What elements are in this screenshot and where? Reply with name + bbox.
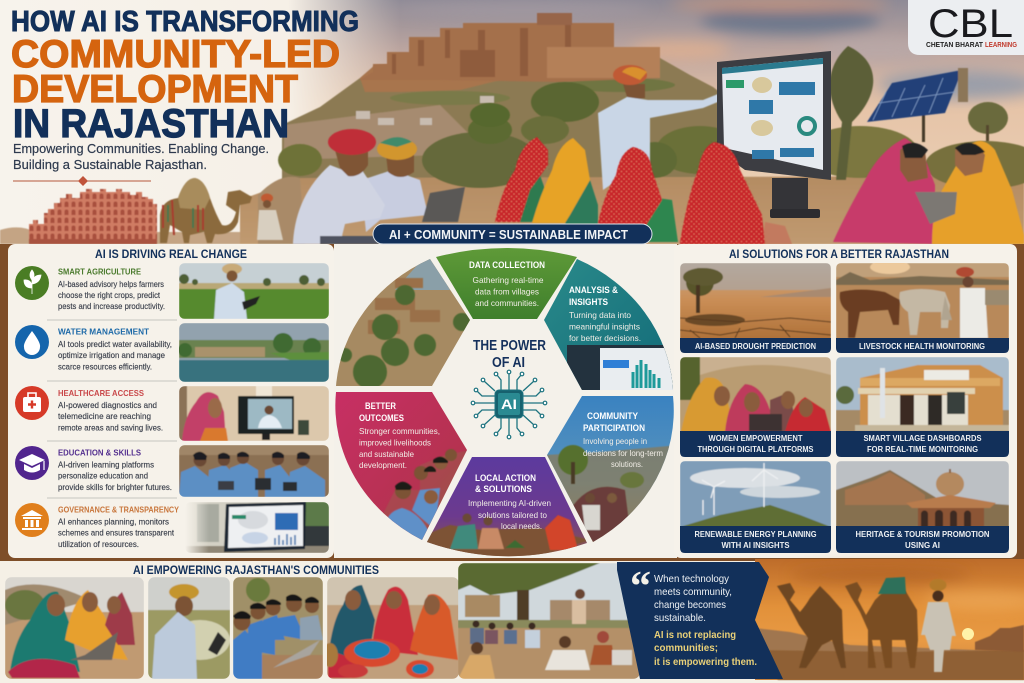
tile: heritage and tourism: HERITAGE & TOURISM PROMOTION — [856, 529, 990, 539]
tile: drought prediction: AI-BASED DROUGHT PREDICTION — [695, 341, 816, 351]
panel heading: AI IS DRIVING REAL CHANGE — [95, 247, 247, 261]
icon: decorated camel — [160, 178, 252, 243]
photo: man with tablet — [148, 577, 230, 679]
row: governance and transparency: schemes and ensures transparent — [58, 528, 175, 538]
segment: better outcomes: Stronger communities, — [359, 426, 440, 436]
quote text: When technology — [654, 573, 730, 585]
tile: women empowerment — [680, 357, 831, 457]
presenter — [598, 65, 725, 190]
segment: community participation: COMMUNITY — [587, 411, 639, 422]
logo: Chetan Bharat Learning: CHETAN BHARAT — [926, 40, 983, 49]
segment: local action and solutions: LOCAL ACTION — [475, 473, 536, 484]
row: healthcare access: AI-powered diagnostics and — [58, 400, 157, 410]
icon: solar panel — [867, 68, 968, 142]
segment: analysis and insights: meaningful insights — [569, 322, 640, 332]
title: HOW AI IS TRANSFORMING — [11, 6, 359, 38]
panel: the power of AI — [330, 244, 680, 565]
center heading: OF AI — [492, 355, 525, 371]
tile: women empowerment: WOMEN EMPOWERMENT — [708, 433, 803, 443]
row: governance and transparency: utilization of resources. — [58, 539, 139, 549]
segment: community participation — [547, 396, 674, 542]
row: education and skills: personalize education and — [58, 470, 148, 480]
photo: village meeting — [458, 563, 640, 679]
row: water management: optimize irrigation and manage — [58, 350, 165, 360]
photo: women with laptop — [5, 577, 144, 679]
segment: local action and solutions: local needs. — [501, 521, 542, 531]
row: governance and transparency: AI enhances planning, monitors — [58, 516, 169, 526]
row: healthcare access — [15, 386, 329, 441]
row: smart agriculture: SMART AGRICULTURE — [58, 266, 141, 276]
land and trees — [0, 46, 1024, 244]
icon: Hawa Mahal palace — [29, 189, 157, 244]
panel: AI solutions for a better Rajasthan — [674, 244, 1017, 558]
row: smart agriculture: choose the right crops, predict — [58, 290, 161, 300]
icon: AI chip — [471, 370, 547, 439]
tile: heritage and tourism — [836, 461, 1009, 553]
segment: analysis and insights: for better decisions. — [569, 333, 641, 343]
segment: analysis and insights: INSIGHTS — [569, 297, 608, 308]
row: education and skills: AI-driven learning platforms — [58, 460, 154, 470]
women with tablet — [833, 138, 1024, 244]
tile: women empowerment: THROUGH DIGITAL PLATFORMS — [698, 444, 814, 454]
tile: renewable energy: WITH AI INSIGHTS — [722, 540, 790, 550]
logo: Chetan Bharat Learning: LEARNING — [985, 40, 1017, 49]
quote text: sustainable. — [654, 612, 706, 624]
segment: community participation: solutions. — [611, 459, 643, 469]
segment: better outcomes: improved livelihoods — [359, 438, 431, 448]
quote text — [654, 573, 732, 624]
row: education and skills: provide skills for brighter futures. — [58, 482, 172, 492]
segment: data collection: Gathering real-time — [472, 275, 544, 285]
row: governance and transparency: GOVERNANCE & TRANSPARENCY — [58, 504, 179, 514]
row: governance and transparency — [15, 502, 329, 553]
row: education and skills — [15, 445, 329, 497]
segment: better outcomes: development. — [359, 460, 407, 470]
row: water management — [15, 323, 329, 382]
row: water management: WATER MANAGEMENT — [58, 326, 150, 336]
segment: analysis and insights: ANALYSIS & — [569, 285, 618, 296]
segment: analysis and insights — [544, 259, 675, 391]
row: water management: scarce resources efficiently. — [58, 362, 152, 372]
segment: local action and solutions: solutions tailored to — [478, 510, 547, 520]
strip heading: AI EMPOWERING RAJASTHAN'S COMMUNITIES — [133, 563, 379, 577]
row: water management: AI tools predict water availability, — [58, 339, 172, 349]
segment: data collection: and communities. — [475, 298, 539, 308]
segment: data collection: DATA COLLECTION — [469, 260, 545, 271]
sky — [295, 0, 1024, 244]
center heading — [473, 338, 546, 371]
photo: women with craft — [322, 577, 459, 679]
quote highlight: communities; — [654, 642, 718, 654]
hero illustration — [0, 0, 1024, 244]
clouds — [390, 0, 1024, 99]
center heading: THE POWER — [473, 338, 546, 354]
banner: AI + community = sustainable impact: AI + COMMUNITY = SUSTAINABLE IMPACT — [389, 227, 628, 242]
row divider — [47, 380, 177, 382]
camel saddle — [878, 577, 906, 594]
distant fort — [975, 625, 1024, 652]
quote text: change becomes — [654, 599, 726, 611]
segment: community participation: Involving people in — [583, 436, 647, 446]
sunset scene with camels — [755, 559, 1024, 680]
row: smart agriculture — [15, 263, 329, 319]
quote highlight: AI is not replacing — [654, 629, 736, 641]
row: smart agriculture: pests and increase productivity. — [58, 301, 165, 311]
title: DEVELOPMENT — [12, 68, 298, 111]
distant hills — [755, 628, 1024, 660]
segment: local action and solutions: & SOLUTIONS — [475, 484, 532, 495]
subtitle: Empowering Communities. Enabling Change. — [13, 141, 269, 156]
quote highlight — [654, 629, 757, 668]
sun — [962, 628, 974, 640]
tile: smart village: SMART VILLAGE DASHBOARDS — [864, 433, 982, 443]
row: healthcare access: telemedicine are reaching — [58, 411, 151, 421]
row: education and skills: EDUCATION & SKILLS — [58, 448, 141, 458]
logo: Chetan Bharat Learning: CBL — [928, 2, 1013, 46]
tile: heritage and tourism: USING AI — [905, 540, 940, 550]
segment: data collection — [436, 248, 577, 319]
subtitle — [13, 141, 269, 172]
seated women, back view — [495, 137, 792, 244]
cream title fade — [0, 0, 400, 244]
ground — [755, 650, 1024, 680]
title: IN RAJASTHAN — [13, 102, 289, 146]
tile: smart village: FOR REAL-TIME MONITORING — [867, 444, 978, 454]
icon: standing man — [257, 194, 283, 240]
row divider — [47, 440, 177, 442]
quote mark: “ — [630, 564, 651, 610]
fort — [360, 13, 660, 82]
quote text: meets community, — [654, 586, 732, 598]
segment: community participation: PARTICIPATION — [583, 423, 645, 434]
tile: smart village — [836, 357, 1009, 457]
man in white — [921, 579, 956, 672]
tile: drought prediction — [680, 263, 831, 353]
segment: analysis and insights: Turning data into — [569, 310, 631, 320]
tile: livestock — [836, 260, 1009, 353]
panel heading: AI SOLUTIONS FOR A BETTER RAJASTHAN — [729, 247, 949, 261]
subtitle: Building a Sustainable Rajasthan. — [13, 157, 207, 172]
icon: AI chip: AI — [501, 396, 517, 412]
segment: better outcomes: BETTER — [365, 401, 396, 412]
segment: local action and solutions: Implementing AI-driven — [468, 498, 551, 508]
camel left — [777, 583, 846, 668]
row: healthcare access: remote areas and saving lives. — [58, 422, 163, 432]
camel right — [845, 582, 918, 668]
segment: community participation: decisions for long-term — [583, 448, 663, 458]
logo: Chetan Bharat Learning — [908, 0, 1024, 55]
row: healthcare access: HEALTHCARE ACCESS — [58, 388, 144, 398]
title: COMMUNITY-LED — [11, 33, 340, 76]
dashboard screen — [717, 51, 831, 218]
quote panel — [617, 562, 783, 679]
segment: better outcomes: and sustainable — [359, 449, 414, 459]
tile: livestock: LIVESTOCK HEALTH MONITORING — [859, 341, 985, 351]
photo: students with laptop — [233, 577, 323, 679]
segment: data collection: data from villages — [475, 286, 539, 296]
segment: better outcomes: OUTCOMES — [359, 413, 404, 424]
mini dashboard — [567, 345, 675, 391]
segment: local action and solutions — [427, 457, 587, 556]
segment: better outcomes — [335, 392, 470, 545]
panel: AI is driving real change — [8, 244, 334, 558]
tile: renewable energy: RENEWABLE ENERGY PLANNING — [694, 529, 817, 539]
bottom strip: AI empowering Rajasthan's communities — [0, 561, 1024, 683]
segment: village photo — [336, 259, 470, 386]
row divider — [47, 497, 177, 499]
tile: renewable energy — [680, 461, 831, 553]
row: smart agriculture: AI-based advisory helps farmers — [58, 279, 164, 289]
row divider — [47, 319, 177, 321]
seated men with laptop — [293, 129, 465, 244]
ornamental divider — [13, 176, 151, 186]
quote highlight: it is empowering them. — [654, 656, 757, 668]
hill — [281, 58, 717, 179]
title — [11, 6, 359, 146]
